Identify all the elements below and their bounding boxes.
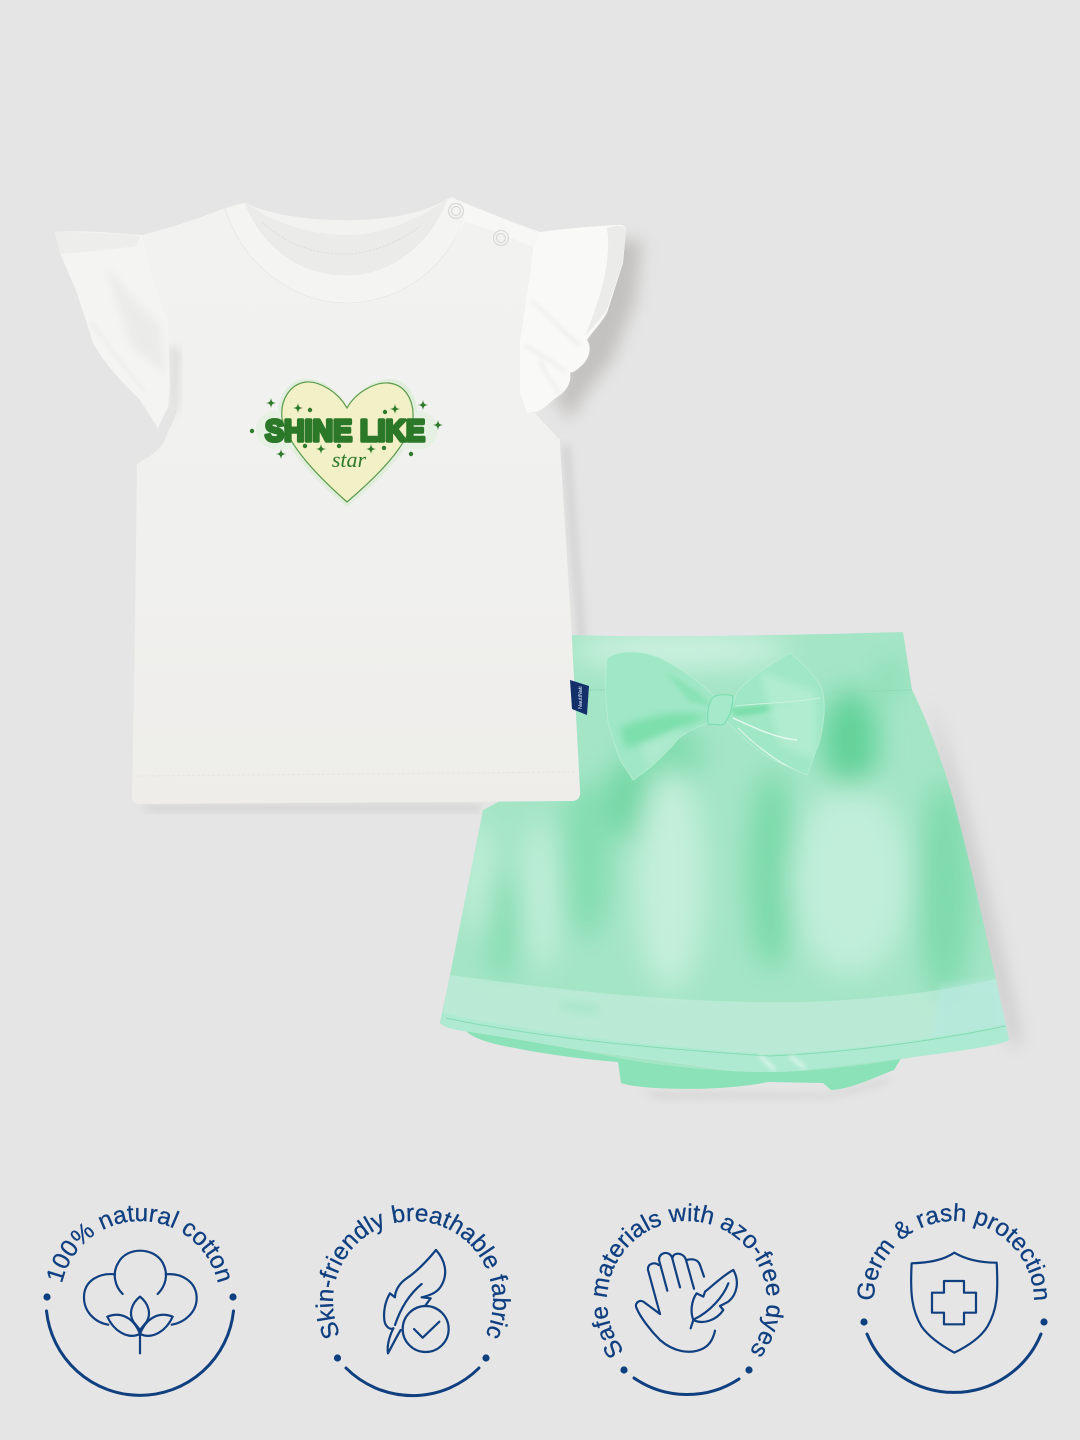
shoulder placket (450, 197, 540, 247)
left flutter sleeve (55, 231, 170, 428)
badge title: Germ & rash protection (857, 1203, 1048, 1300)
bow lobes (605, 652, 824, 780)
print halo (256, 411, 438, 449)
badge title: Safe materials with azo-free dyes (592, 1203, 784, 1358)
white flutter-sleeve t-shirt (55, 197, 626, 804)
skirt main panel (440, 632, 1009, 1072)
icon: cotton boll (84, 1251, 197, 1353)
bow on skirt (605, 652, 824, 780)
badge: skin-friendly breathable fabric (315, 1205, 511, 1398)
garment shadows (140, 240, 1022, 1098)
skirt folds and sheen (440, 634, 1015, 1075)
bow creases (620, 672, 820, 775)
badge arc (867, 1334, 1041, 1392)
badge arc (46, 1311, 234, 1395)
badge dots (620, 1366, 753, 1374)
icon: feather with check (384, 1250, 449, 1353)
badge: 100% natural cotton (43, 1206, 237, 1397)
badge: safe materials with azo-free dyes (592, 1203, 784, 1396)
bow knot (708, 695, 733, 725)
woven side tag: NautiNati (578, 686, 584, 709)
snap button upper (448, 204, 464, 218)
badge dots (860, 1318, 1048, 1326)
snap button lower (494, 230, 508, 246)
skirt under layer (465, 1030, 905, 1090)
skirt hem band (440, 975, 1015, 1075)
woven side tag (570, 680, 589, 715)
badge dots (334, 1354, 490, 1362)
badge title: 100% natural cotton (47, 1206, 230, 1282)
badge arc (346, 1368, 479, 1396)
collar ribbing (225, 197, 464, 303)
shirt shading (137, 345, 576, 776)
icon: shield with cross (911, 1253, 997, 1353)
green skirt (440, 632, 1015, 1090)
badge dots (43, 1293, 237, 1301)
neck stitching (262, 222, 420, 254)
sparkles and dots (250, 398, 443, 459)
icon: hand with feather (636, 1253, 737, 1352)
chest print: heart (250, 379, 443, 507)
heading: SHINE LIKE: SHINE LIKE (265, 413, 425, 448)
heart halo (278, 379, 417, 507)
inside back neck (245, 199, 447, 275)
heart fill (282, 382, 413, 502)
script: star: star (332, 447, 367, 472)
badge arc (634, 1378, 739, 1395)
badge: germ and rash protection (857, 1203, 1048, 1394)
badge title: Skin-friendly breathable fabric (315, 1205, 511, 1338)
t-shirt body (132, 197, 580, 804)
right flutter sleeve (520, 225, 626, 413)
